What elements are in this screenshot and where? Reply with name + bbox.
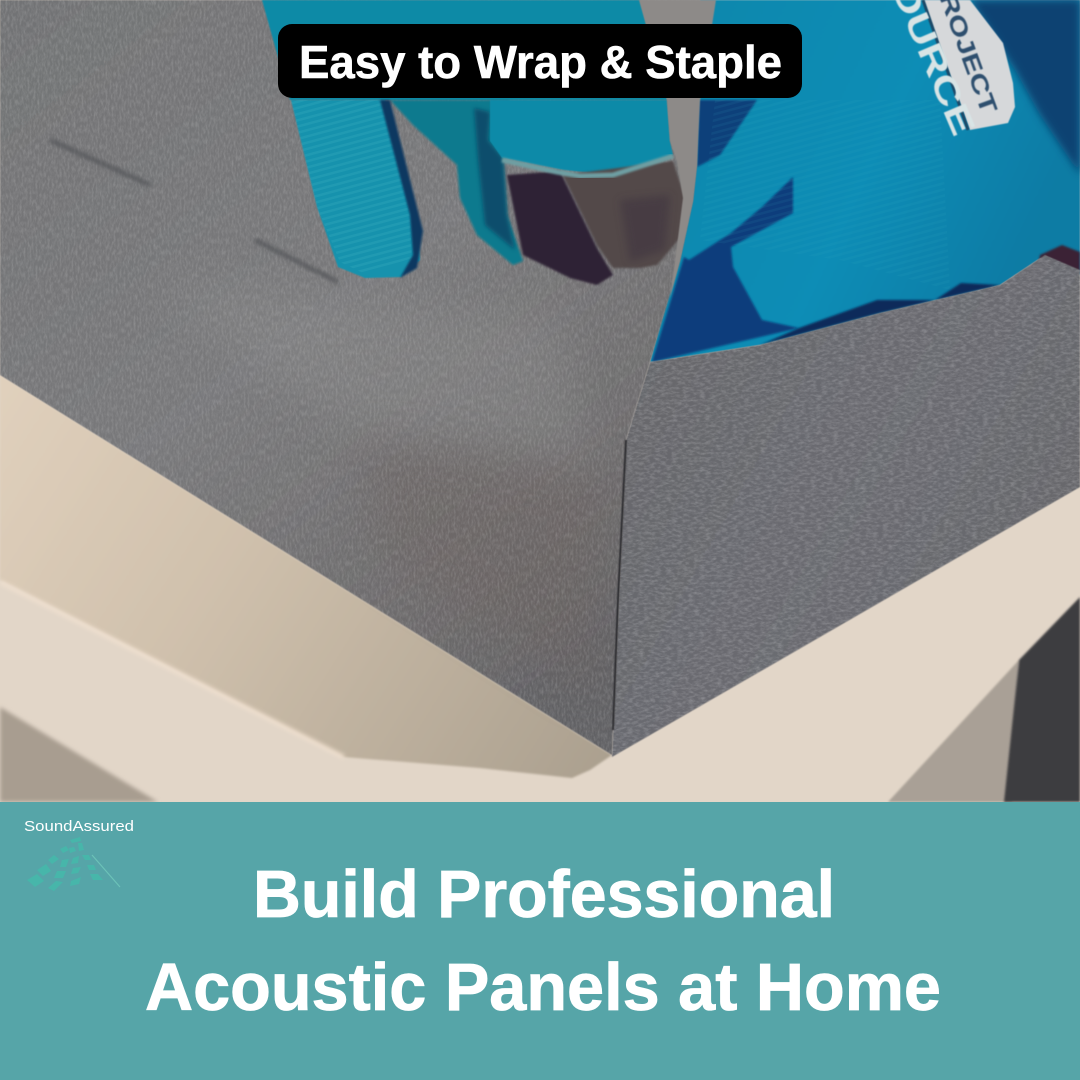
banner background: [0, 802, 1080, 1080]
fabric flap edge: [639, 0, 716, 298]
photo: wrapping fabric around an acoustic panel: [0, 0, 1080, 802]
table leg: [1004, 597, 1080, 802]
pill text: Easy to Wrap & Staple: [299, 36, 782, 88]
finger shadow: [380, 100, 423, 278]
table background: [0, 0, 1080, 802]
dark fingertip at the right edge: [1038, 244, 1080, 272]
sleeve: [650, 0, 1080, 362]
shirt logo patch: [895, 0, 1016, 137]
dark fold next to flap: [697, 100, 757, 167]
logo mark: trailing line: [92, 855, 120, 887]
exposed fingertip, right: [563, 161, 685, 268]
exposed fingertip, left: [507, 171, 613, 285]
finger ribbing: [291, 100, 412, 274]
left face fabric texture: [0, 0, 720, 760]
glove: shadow in finger gap: [474, 108, 515, 250]
glove: pinching fingers: [490, 100, 673, 175]
finger body: [291, 100, 420, 278]
tray rim highlight: [0, 582, 344, 757]
logo mark: sound tiles: [27, 837, 103, 891]
bottom title banner: [0, 802, 1080, 1080]
floor at lower left: [0, 707, 158, 802]
glove: finger behind the pinch: [390, 100, 523, 265]
shadow at lower edge of sleeve: [760, 283, 1000, 345]
fingertip shading: [622, 197, 668, 258]
floor at lower right: [888, 660, 1019, 802]
left panel face: [0, 0, 700, 755]
navy shadow in sleeve opening: [652, 177, 799, 362]
right face fabric texture: [600, 250, 1080, 760]
dark sleeve corner: [970, 0, 1080, 175]
title line 1: Build Professional: [253, 857, 835, 932]
right panel face: [612, 255, 1080, 757]
brand name: SoundAssured: [24, 818, 134, 835]
title line 2: Acoustic Panels at Home: [145, 950, 941, 1025]
corner seam: [613, 440, 626, 730]
glove: thumb finger: [291, 100, 423, 278]
top label pill: [278, 24, 802, 98]
sleeve ribs: [709, 100, 792, 243]
fold crease on the panel: [50, 140, 338, 282]
brown tone on lower fabric: [360, 440, 600, 700]
light tone on left face: [358, 342, 564, 445]
pill background: [278, 24, 802, 98]
glove: hand above the pinch: [262, 0, 667, 100]
glove cuff stitching: [502, 156, 673, 176]
shadowed tray surface: [0, 375, 612, 778]
patch edge line: [923, 0, 968, 130]
brand logo: [24, 818, 134, 891]
patch shape: [923, 0, 1015, 130]
